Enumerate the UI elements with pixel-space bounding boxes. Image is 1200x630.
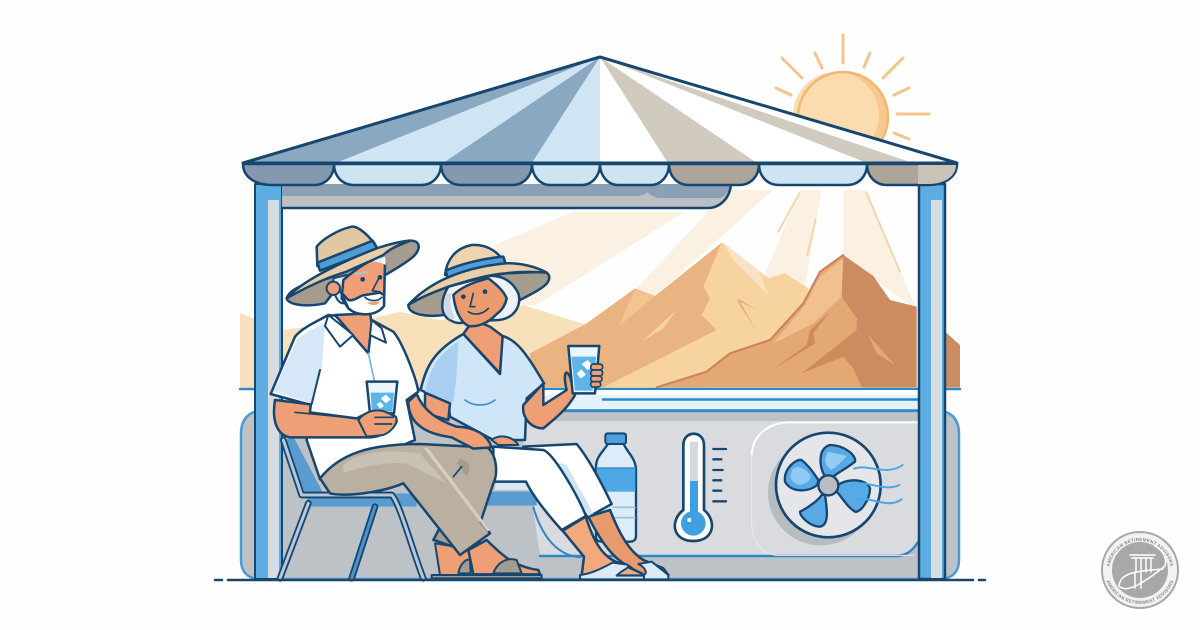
woman glass xyxy=(568,346,603,393)
cooling panel and bench base xyxy=(240,389,960,579)
woman xyxy=(408,245,668,579)
woman head and hat xyxy=(408,245,549,326)
roof canopy xyxy=(243,57,957,185)
canopy underside shadow xyxy=(282,184,731,208)
scalloped valance xyxy=(243,164,957,185)
desert landscape xyxy=(240,190,960,387)
fan xyxy=(768,433,881,545)
water bottle xyxy=(596,433,636,542)
man glass xyxy=(358,382,397,437)
woman trousers xyxy=(523,444,612,517)
thermometer xyxy=(675,434,726,541)
man head and hat xyxy=(287,227,419,314)
man trousers xyxy=(320,444,496,555)
man shirt xyxy=(271,315,418,479)
ground line xyxy=(215,579,985,581)
logo seal: AMERICAN RETIREMENT ADVISORS xyxy=(1106,580,1174,604)
far hills xyxy=(240,305,613,387)
logo seal: AMERICAN RETIREMENT ADVISORS xyxy=(1106,538,1174,566)
woman feet xyxy=(563,510,668,579)
posts xyxy=(255,184,945,579)
chair xyxy=(280,437,580,578)
man xyxy=(271,227,542,578)
central mountain xyxy=(530,243,808,387)
man right arm xyxy=(408,394,492,449)
light beams xyxy=(460,190,917,310)
couple on chairs xyxy=(271,227,668,579)
logo seal xyxy=(1101,531,1179,609)
sun with rays xyxy=(776,35,929,162)
right mountain xyxy=(657,255,960,387)
fan panel xyxy=(752,422,917,555)
wind lines xyxy=(854,465,903,503)
